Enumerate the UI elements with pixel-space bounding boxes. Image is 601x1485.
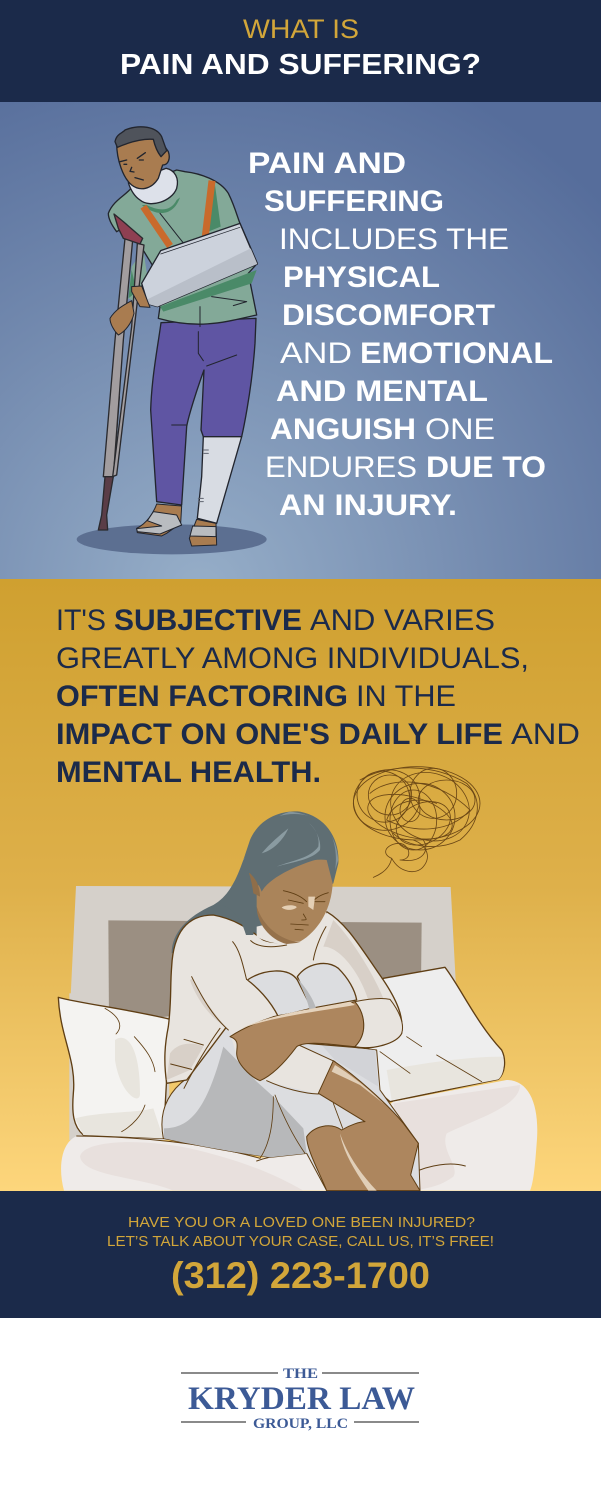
illustration: injured man on crutches [77, 127, 267, 554]
trousers [151, 318, 256, 505]
explanation text: AND VARIES [310, 604, 495, 637]
illustration: distressed woman on bed [58, 762, 537, 1191]
logo: The Kryder Law Group [181, 1366, 419, 1432]
explanation text: GREATLY AMONG INDIVIDUALS, [56, 642, 529, 675]
left sleeve [192, 974, 334, 1094]
definition text: AN INJURY. [279, 489, 457, 522]
hair front [242, 814, 336, 892]
right pillow [340, 967, 505, 1102]
lower arm and feet [307, 1061, 420, 1191]
definition text: ENDURES [265, 451, 417, 484]
ground shadow [77, 524, 267, 554]
logo: The Kryder Law Group: GROUP, LLC [253, 1416, 348, 1432]
panel: subjective impact [0, 579, 601, 1191]
header band [0, 0, 601, 102]
definition text: DUE TO [426, 451, 546, 484]
explanation text: OFTEN FACTORING [56, 680, 348, 713]
arm sling [142, 223, 257, 307]
blanket [61, 1080, 537, 1191]
straps [143, 181, 212, 246]
explanation text: IMPACT ON ONE'S DAILY LIFE [56, 718, 503, 751]
legs [162, 1027, 420, 1191]
panel: definition [0, 102, 601, 579]
definition text: DISCOMFORT [282, 299, 495, 332]
definition text: AND MENTAL [276, 375, 488, 408]
heading: pain and suffering: PAIN AND SUFFERING? [120, 49, 481, 81]
neck collar [128, 168, 177, 204]
upper forearm and hand [230, 1002, 364, 1081]
footer call to action [0, 1191, 601, 1318]
right foot [189, 519, 217, 546]
headboard [70, 886, 456, 1010]
definition text: SUFFERING [264, 185, 444, 218]
explanation text: SUBJECTIVE [114, 604, 302, 637]
shirt [108, 170, 257, 324]
definition text: PAIN AND [248, 147, 406, 180]
hair back [172, 811, 338, 953]
hands [110, 286, 150, 335]
definition text: ONE [425, 413, 495, 446]
logo: The Kryder Law Group: KRYDER LAW [188, 1381, 415, 1417]
leg cast [197, 437, 242, 523]
logo: The Kryder Law Group: THE [283, 1366, 318, 1382]
head [257, 860, 333, 942]
explanation text [56, 604, 580, 789]
call to action text: HAVE YOU OR A LOVED ONE BEEN INJURED? [128, 1214, 475, 1231]
heading: what is: WHAT IS [243, 14, 359, 44]
definition text: AND [280, 337, 352, 370]
left foot [137, 504, 182, 536]
crutch [98, 214, 144, 530]
explanation text: IT'S [56, 604, 106, 637]
explanation text: IN THE [356, 680, 456, 713]
phone number: (312) 223-1700 [171, 1255, 430, 1296]
explanation text: MENTAL HEALTH. [56, 756, 321, 789]
left pillow [58, 997, 170, 1138]
footer call to action: LET’S TALK ABOUT YOUR CASE, CALL US, IT’S FREE! [107, 1233, 494, 1250]
definition text: EMOTIONAL [360, 337, 553, 370]
definition text: ANGUISH [270, 413, 416, 446]
definition text [248, 147, 553, 522]
definition text: INCLUDES THE [279, 223, 509, 256]
explanation text: AND [511, 718, 580, 751]
head [117, 135, 169, 189]
knees [247, 963, 357, 1017]
definition text: PHYSICAL [283, 261, 440, 294]
sweater [165, 912, 402, 1083]
neck [257, 910, 327, 944]
thought scribble [347, 762, 480, 877]
cuff [355, 999, 403, 1048]
